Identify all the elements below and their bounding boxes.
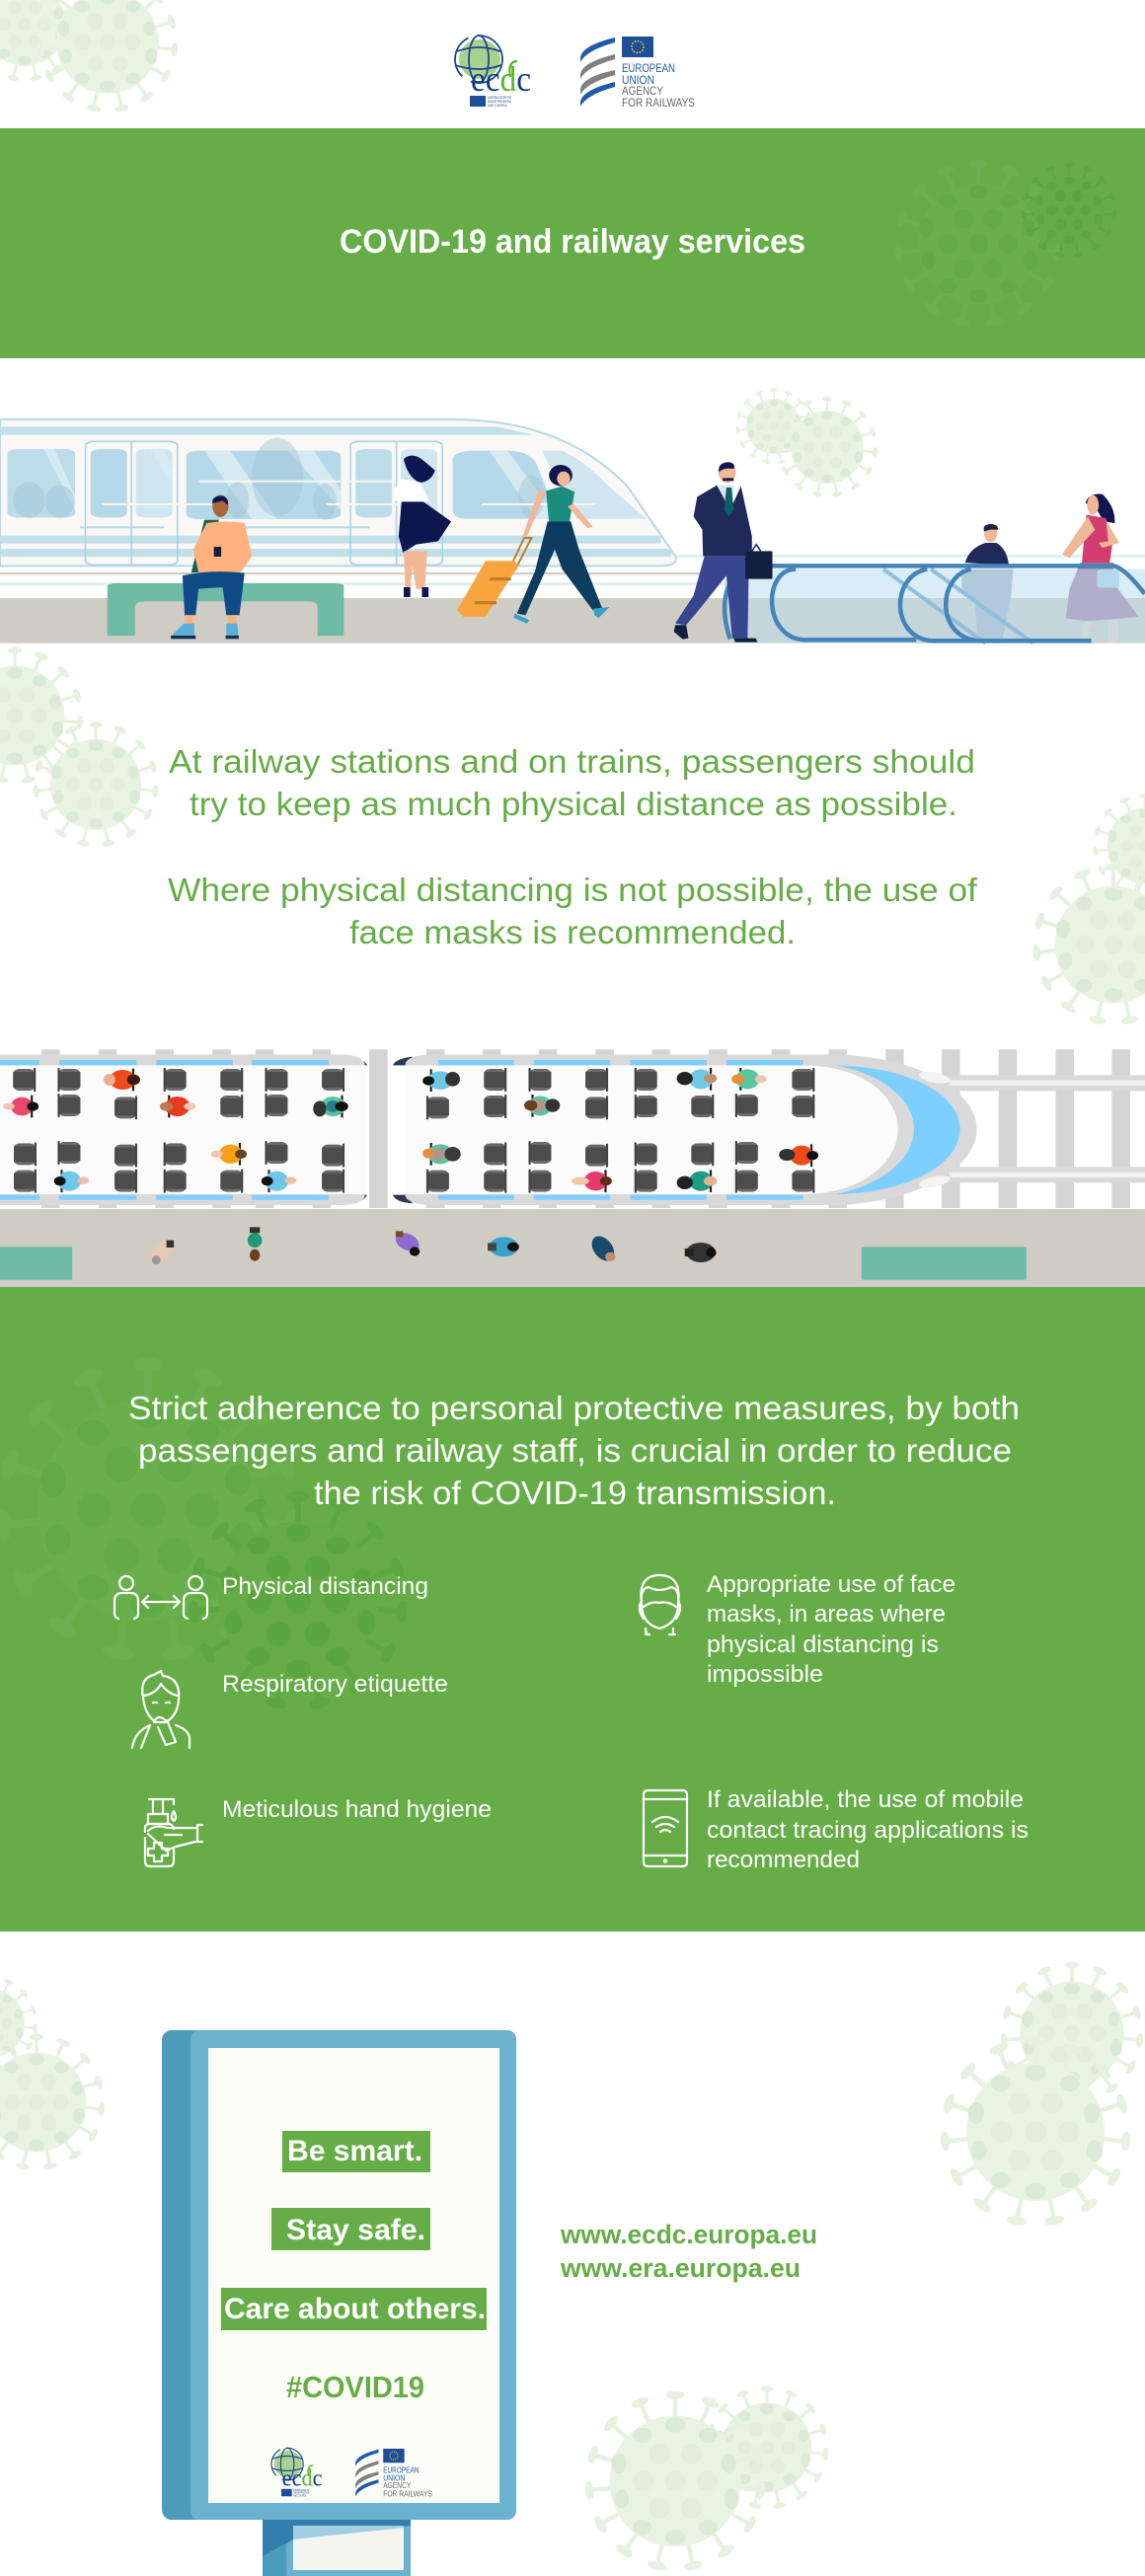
virus decoration: inside panel	[0, 1357, 409, 1710]
billboard post	[263, 2520, 411, 2576]
logo: ECDC globe: AND CONTROL	[488, 104, 507, 108]
seated passengers from above	[3, 1068, 818, 1192]
logo: EU Agency for Railways: EUROPEAN	[622, 63, 675, 75]
icon: hand sanitizer	[145, 1799, 202, 1866]
slogan: stay safe	[271, 2208, 430, 2250]
virus decoration: header	[894, 160, 1117, 328]
seats	[13, 1068, 814, 1193]
mini logos: FOR RAILWAYS	[383, 2489, 432, 2498]
train car connectors	[349, 1057, 413, 1203]
heading text	[128, 1390, 1020, 1511]
person: woman with suitcase	[457, 465, 610, 624]
virus decoration: top left	[0, 0, 179, 113]
logo: EU Agency for Railways: UNION	[622, 75, 654, 87]
virus decoration: bottom right	[940, 1962, 1144, 2228]
mini logos: DISEASE PREVENTION	[293, 2492, 309, 2495]
bench	[108, 583, 344, 636]
panel: header band	[0, 128, 1145, 358]
icon: respiratory etiquette	[132, 1671, 190, 1748]
slogan: stay safe: Stay safe.	[286, 2214, 425, 2246]
mini logos: EUROPEAN	[383, 2465, 419, 2474]
mini logos: UNION	[383, 2474, 405, 2483]
platform background rails	[0, 555, 1145, 644]
virus decoration: bottom left	[0, 1976, 106, 2171]
icon: face mask	[640, 1575, 680, 1634]
text block: distancing advice: try to keep as much physical distance as possible.	[190, 786, 957, 822]
train body	[0, 1054, 977, 1205]
label: face masks: Appropriate use of face	[707, 1571, 955, 1598]
heading text: passengers and railway staff, is crucial in order to reduce	[138, 1432, 1012, 1469]
virus decoration: above train	[735, 388, 878, 497]
label: respiratory etiquette: Respiratory etiquette	[222, 1671, 448, 1698]
website links: www.ecdc.europa.eu	[560, 2220, 817, 2249]
mini logos	[271, 2448, 432, 2498]
slogan: care about others: Care about others.	[224, 2293, 486, 2325]
panel: protective measures	[0, 1287, 1145, 1932]
person: woman in dark skirt	[393, 456, 451, 597]
website links	[560, 2220, 817, 2283]
text block: distancing advice: Where physical distancing is not possible, the use of	[168, 871, 978, 908]
label: hand hygiene: Meticulous hand hygiene	[222, 1796, 492, 1823]
icon: physical distancing	[114, 1576, 207, 1619]
person: seated man with phone	[171, 494, 252, 639]
billboard screen	[208, 2048, 499, 2503]
heading text: Strict adherence to personal protective measures, by both	[128, 1390, 1020, 1426]
person: man on escalator	[960, 524, 1014, 644]
billboard	[162, 2030, 516, 2576]
website links: www.era.europa.eu	[560, 2253, 801, 2283]
mini logos: ecdc	[282, 2464, 323, 2491]
slogan: be smart: Be smart.	[287, 2135, 422, 2167]
text block: distancing advice	[168, 743, 978, 950]
train	[0, 419, 676, 566]
label: contact tracing: contact tracing applications is	[707, 1817, 1029, 1844]
person: businessman with briefcase	[674, 462, 772, 643]
label: face masks: physical distancing is	[707, 1631, 939, 1658]
logo: ECDC globe	[455, 36, 531, 108]
person: woman in pink	[1062, 494, 1139, 644]
billboard frame	[162, 2030, 221, 2520]
platform	[0, 1209, 1145, 1287]
mini logos: AGENCY	[383, 2481, 411, 2490]
track	[41, 1049, 1145, 1208]
virus decoration: right of text	[1031, 794, 1145, 1025]
mini logos: EUROPEAN CENTRE FOR	[293, 2489, 309, 2492]
label: contact tracing: If available, the use of mobile	[707, 1786, 1024, 1813]
escalator	[723, 566, 1145, 644]
hashtag: #COVID19	[286, 2370, 424, 2404]
label: physical distancing: Physical distancing	[222, 1573, 428, 1600]
walking passengers from above	[145, 1227, 717, 1265]
heading text: the risk of COVID-19 transmission.	[314, 1475, 836, 1511]
virus decoration: left of text	[0, 646, 159, 848]
label: face masks	[707, 1571, 955, 1688]
text block: distancing advice: face masks is recommended.	[349, 914, 796, 950]
logo: EU Agency for Railways	[580, 37, 695, 110]
logo: EU Agency for Railways: FOR RAILWAYS	[622, 98, 695, 110]
logo: ECDC globe: EUROPEAN CENTRE FOR	[488, 96, 511, 100]
illustration: train seen from above	[0, 1049, 1145, 1287]
illustration: train station platform	[0, 419, 1145, 644]
label: contact tracing: recommended	[707, 1847, 860, 1873]
logo: EU Agency for Railways: AGENCY	[622, 86, 663, 98]
logo: ECDC globe: DISEASE PREVENTION	[488, 100, 511, 104]
label: face masks: impossible	[707, 1661, 823, 1688]
logo: ECDC globe: ecdc	[471, 59, 531, 99]
text block: distancing advice: At railway stations and on trains, passengers should	[169, 743, 975, 780]
mini logos: AND CONTROL	[293, 2494, 307, 2497]
virus decoration: bottom centre	[584, 2386, 829, 2572]
label: contact tracing	[707, 1786, 1029, 1873]
logos: ECDC and EU Agency for Railways	[455, 36, 695, 110]
icon: mobile phone	[644, 1790, 687, 1866]
title: COVID-19 and railway services	[340, 223, 805, 261]
label: face masks: masks, in areas where	[707, 1601, 946, 1628]
